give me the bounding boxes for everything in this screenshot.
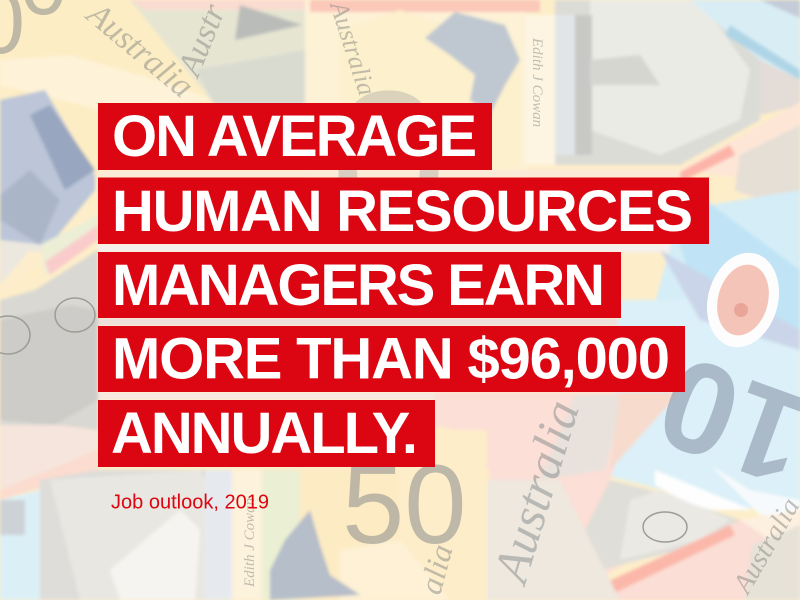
headline line 3: MANAGERS EARN: [112, 253, 605, 318]
top-middle navy figure: [425, 12, 520, 118]
right blue note: [610, 190, 800, 520]
lower middle red note: [435, 392, 660, 600]
banknote lettering: alia: [412, 540, 460, 598]
portrait glasses: [0, 298, 687, 542]
banknote lettering: Austr: [170, 0, 233, 83]
banknote wheel emblem: [697, 245, 789, 355]
top centre green-grey note: [130, 0, 305, 105]
bottom centre guilloche: [487, 480, 620, 600]
top-left yellow note: [0, 0, 300, 180]
lower-left portrait: [40, 470, 240, 600]
headline line 5: ANNUALLY.: [111, 401, 418, 466]
source note: Job outlook, 2019: [111, 492, 269, 514]
banknote lettering: Edith J Cowan: [242, 498, 258, 588]
banknote numerals: 50: [342, 442, 467, 567]
centre band behind bars: [98, 170, 680, 178]
banknote numerals: 0: [330, 47, 447, 282]
banknote lettering: Edith J Cowan: [529, 37, 545, 127]
headline line 4: MORE THAN $96,000: [112, 326, 670, 392]
bottom right portrait: [580, 480, 740, 570]
top-right blue note: [690, 0, 800, 85]
headline line 2: HUMAN RESOURCES: [112, 179, 693, 244]
bottom yellow note: [232, 470, 490, 600]
right red note: [680, 102, 800, 200]
headline: [98, 103, 709, 467]
banknote lettering: Australia: [481, 394, 590, 591]
top-right portrait: [555, 0, 760, 165]
headline line 1: ON AVERAGE: [112, 104, 477, 169]
top-middle yellow note: [305, 0, 525, 180]
left portrait: [0, 250, 98, 480]
bottom right red note: [570, 520, 800, 600]
bottom figure: [270, 510, 360, 600]
left navy figure: [0, 90, 95, 270]
banknote lettering: Australia: [324, 0, 382, 99]
